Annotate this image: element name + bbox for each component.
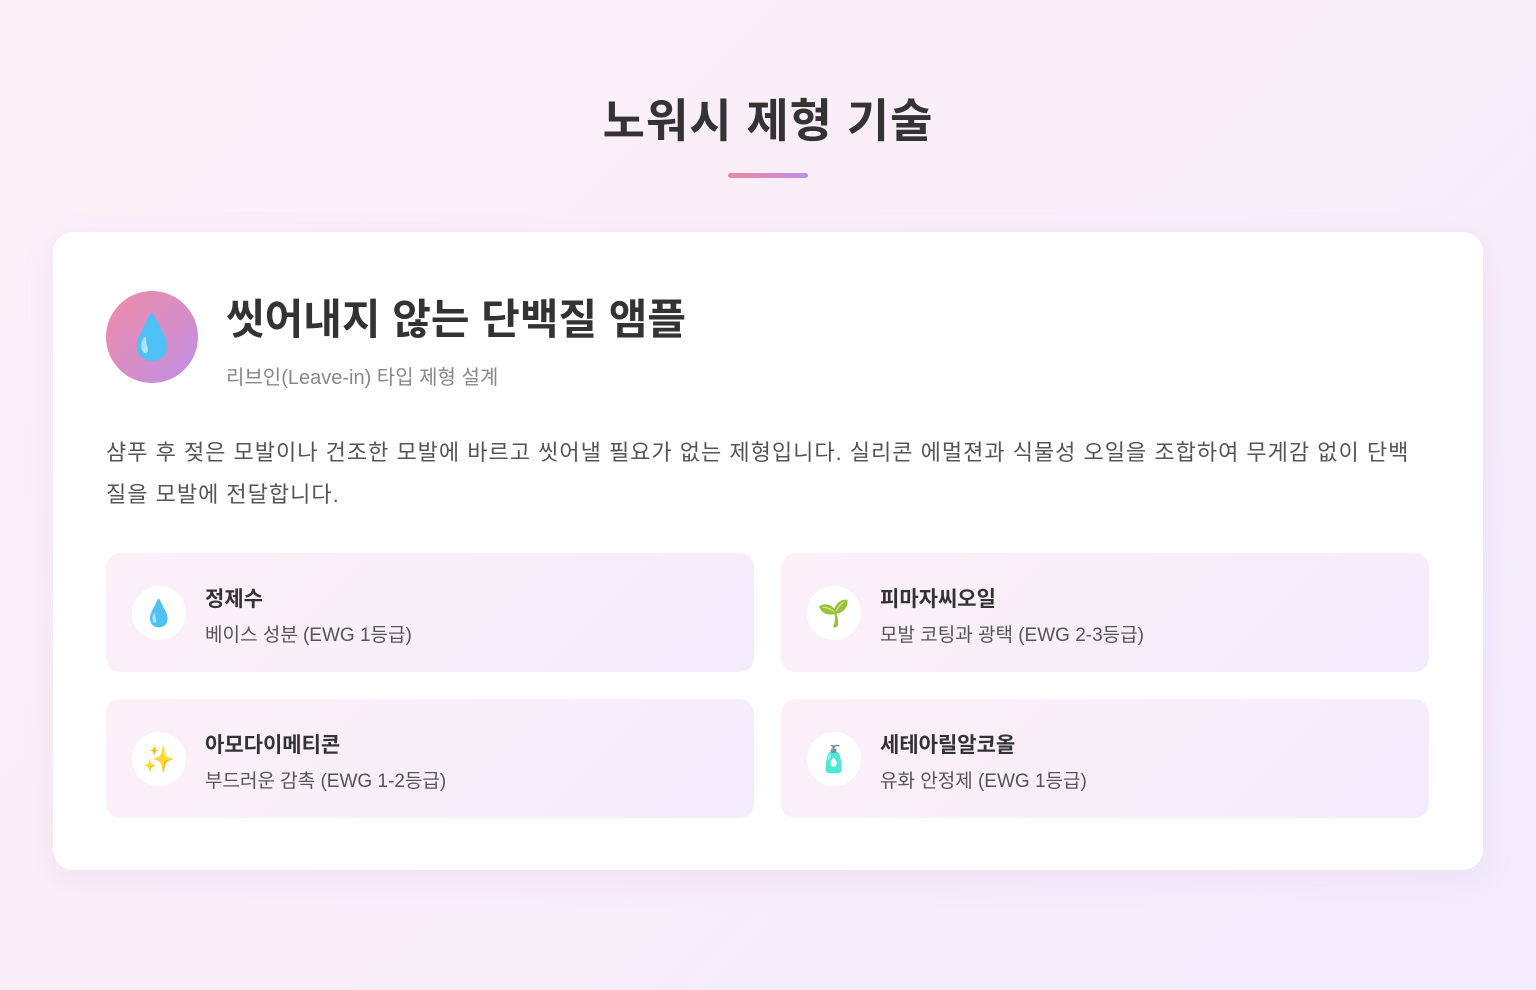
ingredient: cetearyl alcohol	[781, 699, 1429, 818]
subtitle: 리브인(Leave-in) 타입 제형 설계	[226, 367, 498, 389]
ingredient: purified water: 정제수	[205, 588, 263, 611]
ingredient: amodimethicone: ✨	[143, 744, 175, 774]
ingredient: purified water	[106, 553, 754, 672]
ingredient: cetearyl alcohol: 유화 안정제 (EWG 1등급)	[880, 771, 1087, 792]
description text: 샴푸 후 젖은 모발이나 건조한 모발에 바르고 씻어낼 필요가 없는 제형입니다. 실리콘 에멀젼과 식물성 오일을 조합하여 무게감 없이 단백질을 모발에 전달합니다.	[106, 440, 1409, 507]
ingredient: cetearyl alcohol: 세테아릴알코올	[880, 734, 1015, 757]
ingredient: amodimethicone: 아모다이메티콘	[205, 734, 340, 757]
icon: water drop	[106, 291, 198, 383]
icon: water drop: 💧	[125, 313, 179, 362]
heading: 씻어내지 않는 단백질 앰플	[226, 296, 686, 343]
ingredient: castor seed oil	[781, 553, 1429, 672]
ingredient: amodimethicone	[106, 699, 754, 818]
ingredient: castor seed oil: 피마자씨오일	[880, 588, 996, 611]
panel: main card	[53, 232, 1483, 870]
ingredient: purified water: 베이스 성분 (EWG 1등급)	[205, 625, 412, 646]
ingredient: amodimethicone: 부드러운 감촉 (EWG 1-2등급)	[205, 771, 446, 792]
ingredient: cetearyl alcohol: 🧴	[818, 744, 850, 774]
ingredient: purified water: 💧	[143, 598, 175, 628]
ingredient: castor seed oil: 🌱	[818, 598, 850, 628]
title: 노워시 제형 기술	[603, 95, 933, 147]
ingredient: castor seed oil: 모발 코팅과 광택 (EWG 2-3등급)	[880, 625, 1144, 646]
